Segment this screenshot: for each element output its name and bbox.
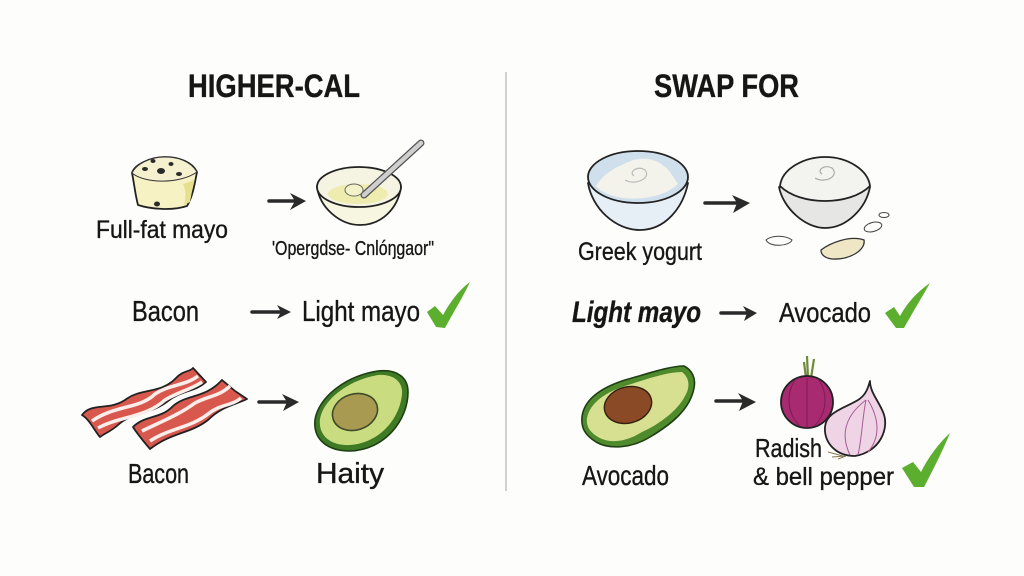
label: greek yogurt: Greek yogurt <box>578 238 702 266</box>
icon: bacon strips <box>82 368 247 449</box>
icon: green check <box>902 433 950 487</box>
label: haity: Haity <box>316 458 385 490</box>
label: light mayo: Light mayo <box>302 296 420 328</box>
title: higher-cal: HIGHER-CAL <box>188 68 360 104</box>
label: and bell pepper: & bell pepper <box>753 463 894 491</box>
arrow <box>259 394 299 411</box>
label: avocado: Avocado <box>582 460 669 491</box>
icon: green check <box>885 283 930 328</box>
icon: greek yogurt bowl <box>588 151 688 230</box>
icon: red onion and radish <box>781 356 885 459</box>
label: bacon: Bacon <box>132 296 199 328</box>
label: full-fat mayo: Full-fat mayo <box>96 216 228 244</box>
panel: swap-for column <box>572 151 950 491</box>
label: radish: Radish <box>755 433 822 463</box>
label: avocado: Avocado <box>779 297 871 328</box>
label: light mayo: Light mayo <box>572 296 701 329</box>
icon: yogurt bowl with crumbs <box>766 157 889 259</box>
arrow <box>269 193 306 210</box>
label: garbled caption: 'Opergdse- Cnlóŋgaor" <box>272 238 434 260</box>
icon: green check <box>427 282 470 328</box>
icon: full-fat mayo block <box>132 157 197 209</box>
panel: higher-cal column <box>82 143 470 490</box>
title: swap for: SWAP FOR <box>654 68 799 104</box>
arrow <box>705 195 750 213</box>
icon: avocado with brown pit <box>582 366 695 447</box>
label: bacon: Bacon <box>128 458 189 489</box>
arrow <box>252 305 291 319</box>
arrow <box>721 306 757 321</box>
icon: bowl of mayo with spoon <box>317 143 421 225</box>
icon: avocado half with pale pit <box>315 371 408 451</box>
arrow <box>716 393 756 411</box>
